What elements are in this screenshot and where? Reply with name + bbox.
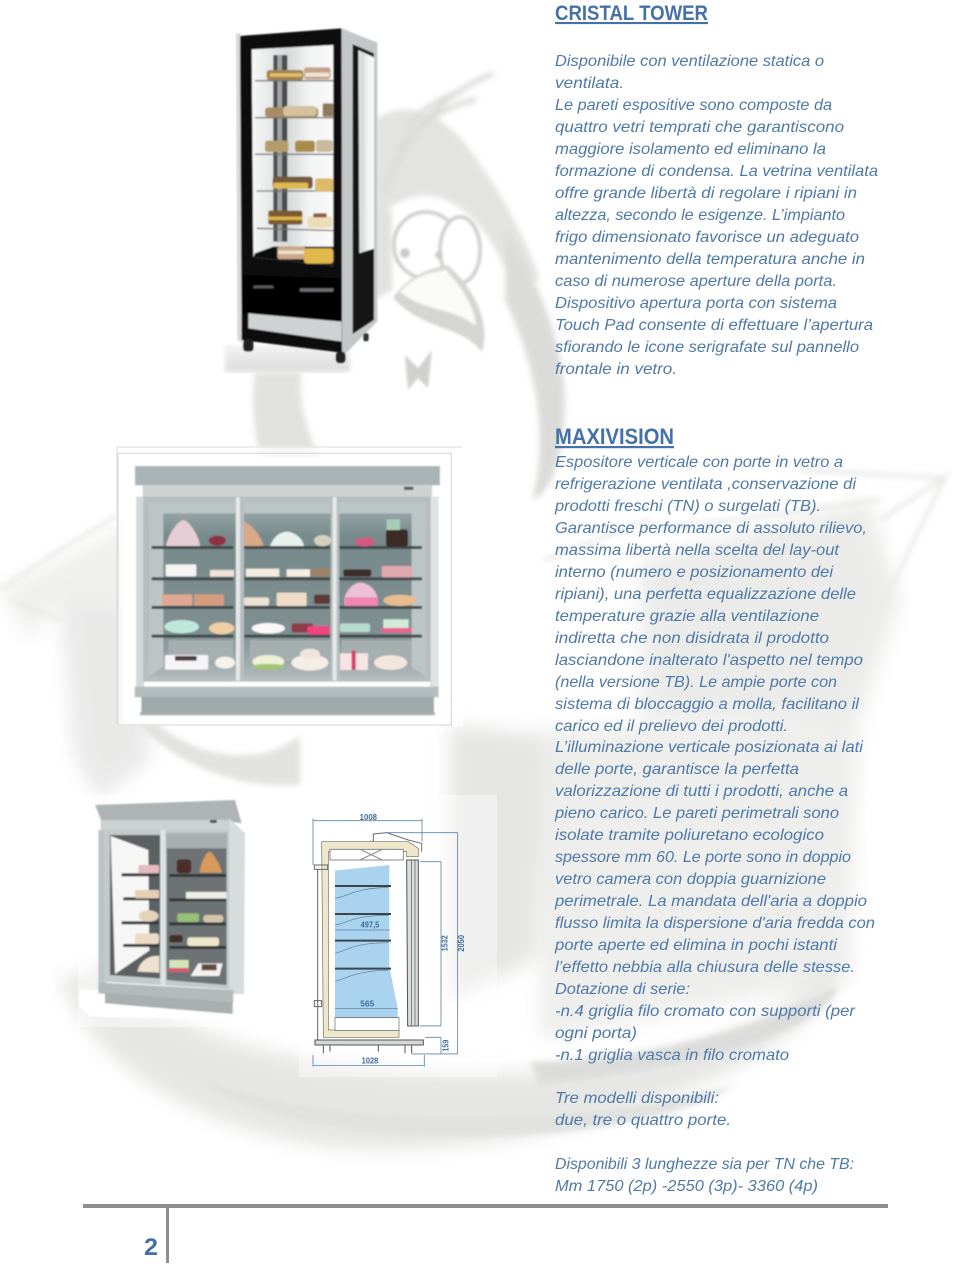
text block: Maxivision description: ogni porta) [555,1025,637,1042]
heading: Maxivision: MAXIVISION [555,424,674,449]
text block: Maxivision description [554,454,875,1064]
text block: Maxivision description: prodotti freschi (TN) o surgelati (TB). [554,498,821,515]
text block: Cristal Tower description: ventilata. [555,75,624,92]
text block: Maxivision description: perimetrale. La mandata dell'aria a doppio [554,893,867,910]
text block: Maxivision description: temperature grazie alla ventilazione [555,608,819,625]
text block: Maxivision description: lasciandone inalterato l'aspetto nel tempo [555,652,863,669]
cabinet section [314,833,423,1053]
dimension labels: 1028 [362,1055,379,1065]
text block: Cristal Tower description: altezza, secondo le esigenze. L’impianto [555,207,845,224]
dimension labels: 565 [360,999,375,1009]
text block: Maxivision description: delle porte, garantisce la perfetta [555,761,799,778]
text block: Maxivision description: (nella versione TB). Le ampie porte con [555,674,837,691]
text block: Cristal Tower description: mantenimento della temperatura anche in [555,251,865,268]
text block: Cristal Tower description: Touch Pad consente di effettuare l’apertura [555,317,873,334]
text block: Cristal Tower description: frigo dimensionato favorisce un adeguato [555,229,859,246]
text block: Maxivision description: indiretta che non disidrata il prodotto [555,630,829,647]
text block: Maxivision description: -n.1 griglia vasca in filo cromato [555,1047,789,1064]
footer rule [83,1204,888,1208]
text block: available models [555,1090,731,1129]
text block: Maxivision description: pieno carico. Le pareti perimetrali sono [554,805,839,822]
picture: technical cross-section drawing with dimensions [299,795,497,1077]
picture: Maxivision three-door cabinet [117,446,463,726]
text block: Maxivision description: L’illuminazione verticale posizionata ai lati [555,739,863,756]
text block: Maxivision description: porte aperte ed elimina in pochi istanti [554,937,837,954]
text block: Cristal Tower description: offre grande libertà di regolare i ripiani in [555,185,857,202]
text block: Maxivision description: vetro camera con doppia guarnizione [555,871,826,888]
footer vertical rule [166,1208,169,1263]
dimension lines [313,818,458,1067]
text block: Cristal Tower description: maggiore isolamento ed eliminano la [555,141,826,158]
text block: Maxivision description: l’effetto nebbia alla chiusura delle stesse. [555,959,855,976]
text block: Maxivision description: Espositore verticale con porte in vetro a [555,454,843,471]
text block: Cristal Tower description: Disponibile con ventilazione statica o [555,53,824,70]
text block: Maxivision description: massima libertà nella scelta del lay-out [555,542,840,559]
text block: Maxivision description: interno (numero e posizionamento dei [555,564,833,581]
text block: Cristal Tower description: Dispositivo apertura porta con sistema [555,295,837,312]
dimension labels: 1532 [439,935,449,951]
text block: Cristal Tower description [555,53,878,378]
text block: Maxivision description: valorizzazione di tutti i prodotti, anche a [555,783,848,800]
picture: Cristal Tower display case [225,28,377,372]
dimension labels: 2050 [456,935,466,952]
text block: Maxivision description: Dotazione di serie: [555,981,690,998]
text block: Maxivision description: -n.4 griglia filo cromato con supporti (per [555,1003,856,1020]
text block: available models: Tre modelli disponibili: [555,1090,719,1107]
text block: Maxivision description: sistema di bloccaggio a molla, facilitano il [555,696,859,713]
text block: Maxivision description: ripiani), una perfetta equalizzazione delle [555,586,856,603]
text block: Cristal Tower description: formazione di condensa. La vetrina ventilata [555,163,878,180]
picture: Maxivision two-door cabinet [78,795,268,1027]
text block: Maxivision description: refrigerazione ventilata ,conservazione di [555,476,856,493]
text block: Cristal Tower description: caso di numerose aperture della porta. [555,273,837,290]
text block: Maxivision description: isolate tramite poliuretano ecologico [555,827,824,844]
dimension labels [360,812,466,1065]
dimension labels: 1008 [360,812,377,822]
text block: available lengths [555,1156,854,1195]
text block: Cristal Tower description: frontale in vetro. [555,361,677,378]
text block: Cristal Tower description: quattro vetri temprati che garantiscono [555,119,844,136]
text block: available lengths: Disponibili 3 lunghezze sia per TN che TB: [555,1156,854,1173]
text block: Cristal Tower description: sfiorando le icone serigrafate sul pannello [555,339,859,356]
text block: available models: due, tre o quattro porte. [555,1112,731,1129]
heading: Cristal Tower: CRISTAL TOWER [555,2,708,25]
text block: Maxivision description: Garantisce performance di assoluto rilievo, [555,520,867,537]
dimension labels: 497,5 [361,920,380,930]
text block: Maxivision description: flusso limita la dispersione d'aria fredda con [555,915,875,932]
text block: available lengths: Mm 1750 (2p) -2550 (3p)- 3360 (4p) [555,1178,818,1195]
page number: 2 [144,1234,158,1261]
text block: Maxivision description: spessore mm 60. Le porte sono in doppio [555,849,851,866]
dimension labels: 159 [441,1039,451,1052]
text block: Cristal Tower description: Le pareti espositive sono composte da [555,97,832,114]
text block: Maxivision description: carico ed il prelievo dei prodotti. [555,718,788,735]
